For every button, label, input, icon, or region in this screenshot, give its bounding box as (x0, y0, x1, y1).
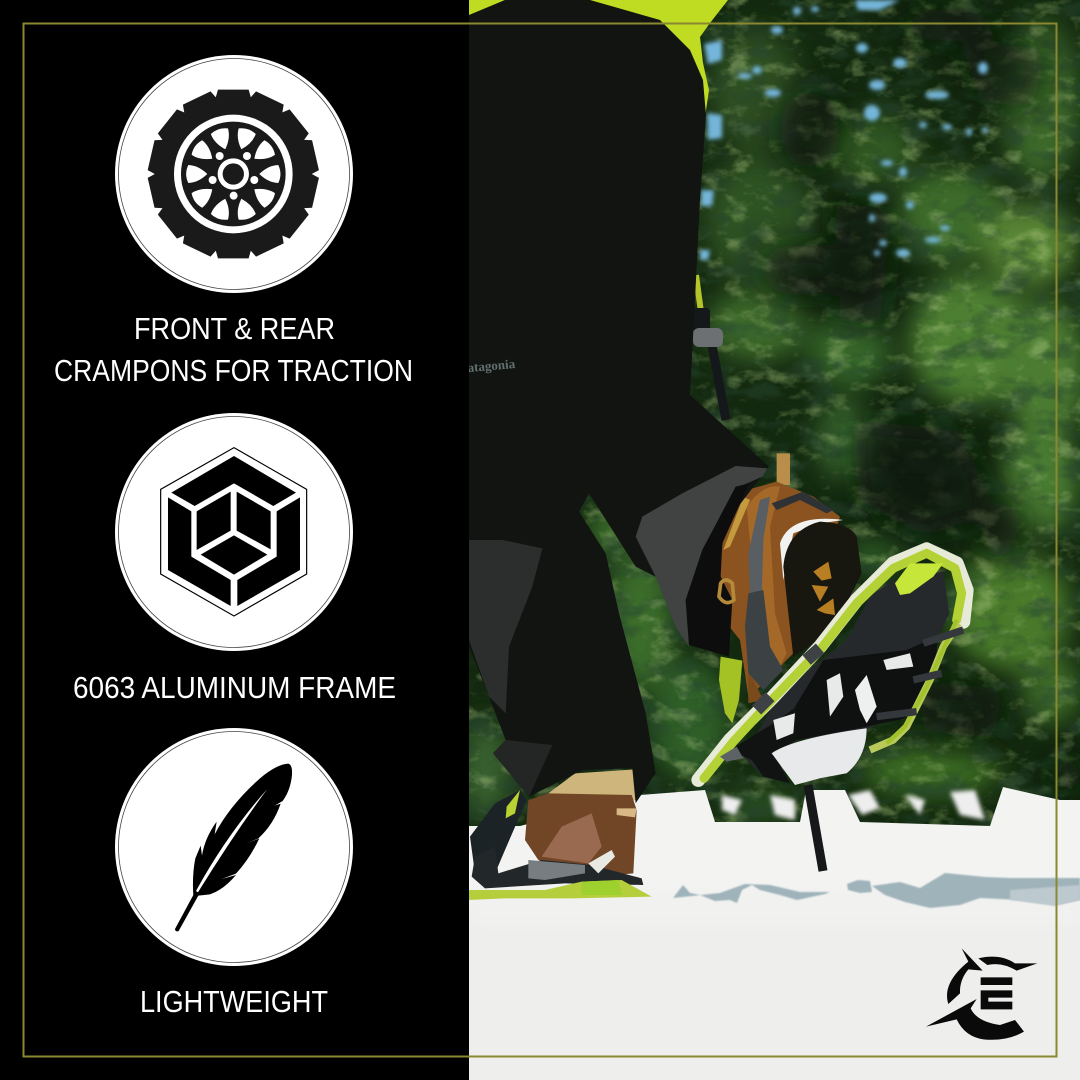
icon: feather (115, 728, 353, 966)
sky gaps (700, 0, 988, 260)
snow ground (469, 787, 1080, 1080)
panel: black features column (0, 0, 469, 1080)
trekking pole upper (693, 275, 726, 420)
raised boot (713, 453, 862, 703)
neon jacket (469, 0, 728, 117)
frame tube (704, 553, 962, 778)
icon: hexagon cube (115, 413, 353, 651)
pants (469, 0, 769, 803)
deep shadow masses (760, 7, 1080, 799)
boot hardware over pants (719, 580, 742, 723)
brand logo (926, 948, 1037, 1040)
packed snow under deck (772, 728, 867, 785)
heading: crampons: FRONT & REAR (134, 311, 335, 346)
front binding plate (895, 563, 943, 595)
planted boot (468, 769, 652, 900)
heading: frame: 6063 ALUMINUM FRAME (73, 670, 396, 705)
photo: snowshoer in forest (459, 0, 1080, 1080)
heading: crampons (54, 311, 413, 388)
snow shadow band (673, 873, 1080, 908)
snow patches in branches (722, 790, 985, 820)
decking (743, 572, 949, 777)
frame snow outline (698, 549, 967, 780)
cross bars (877, 630, 963, 717)
pole lower in snow (808, 785, 823, 871)
icon: tire (115, 55, 353, 293)
pants brand text: Patagonia (459, 356, 516, 376)
heading: lightweight: LIGHTWEIGHT (140, 984, 328, 1019)
snowshoe (698, 549, 967, 785)
forest background (460, 0, 1080, 840)
rear leg grey folds (469, 540, 542, 713)
raised cuff (636, 466, 767, 647)
heading: crampons: CRAMPONS FOR TRACTION (54, 353, 413, 388)
